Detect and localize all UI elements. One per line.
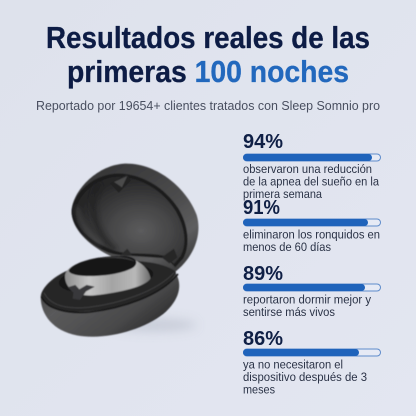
description 94% xyxy=(243,162,379,201)
description 91%: menos de 60 días xyxy=(243,240,331,254)
subtitle: Reportado por 19654+ clientes tratados con Sleep Somnio pro xyxy=(36,98,380,113)
description 86%: ya no necesitaron el xyxy=(243,358,343,372)
description 89%: reportaron dormir mejor y xyxy=(243,292,372,306)
title xyxy=(46,21,370,89)
stat: 94%: 94% xyxy=(243,130,283,153)
stat: 94% xyxy=(243,130,380,201)
stat: 91%: 91% xyxy=(243,196,280,219)
progress bar 89% xyxy=(243,284,380,291)
stat: 86% xyxy=(243,327,380,396)
description 91% xyxy=(243,228,380,254)
title: Resultados reales de las xyxy=(46,21,370,55)
product image: hearing device case xyxy=(41,164,198,337)
description 86% xyxy=(243,358,367,396)
lid clip xyxy=(110,174,131,193)
silver device xyxy=(65,256,151,300)
stat: 86%: 86% xyxy=(243,327,283,350)
stat: 89% xyxy=(243,262,380,319)
case lid xyxy=(72,164,198,273)
description 94%: primera semana xyxy=(243,187,322,201)
progress bar 91% xyxy=(243,219,380,226)
stat: 91% xyxy=(243,196,380,254)
case base xyxy=(41,259,179,337)
description 94%: de la apnea del sueño en la xyxy=(243,174,379,188)
title: primeras 100 noches xyxy=(67,55,349,89)
description 89% xyxy=(243,292,372,319)
progress bar 94% xyxy=(243,154,380,161)
stat: 89%: 89% xyxy=(243,262,283,285)
progress bar 86% xyxy=(243,349,380,356)
description 86%: dispositivo después de 3 xyxy=(243,370,367,384)
description 91%: eliminaron los ronquidos en xyxy=(243,228,380,242)
ground shadow xyxy=(110,319,197,331)
description 86%: meses xyxy=(243,382,275,396)
description 89%: sentirse más vivos xyxy=(243,305,335,319)
description 94%: observaron una reducción xyxy=(243,162,372,176)
